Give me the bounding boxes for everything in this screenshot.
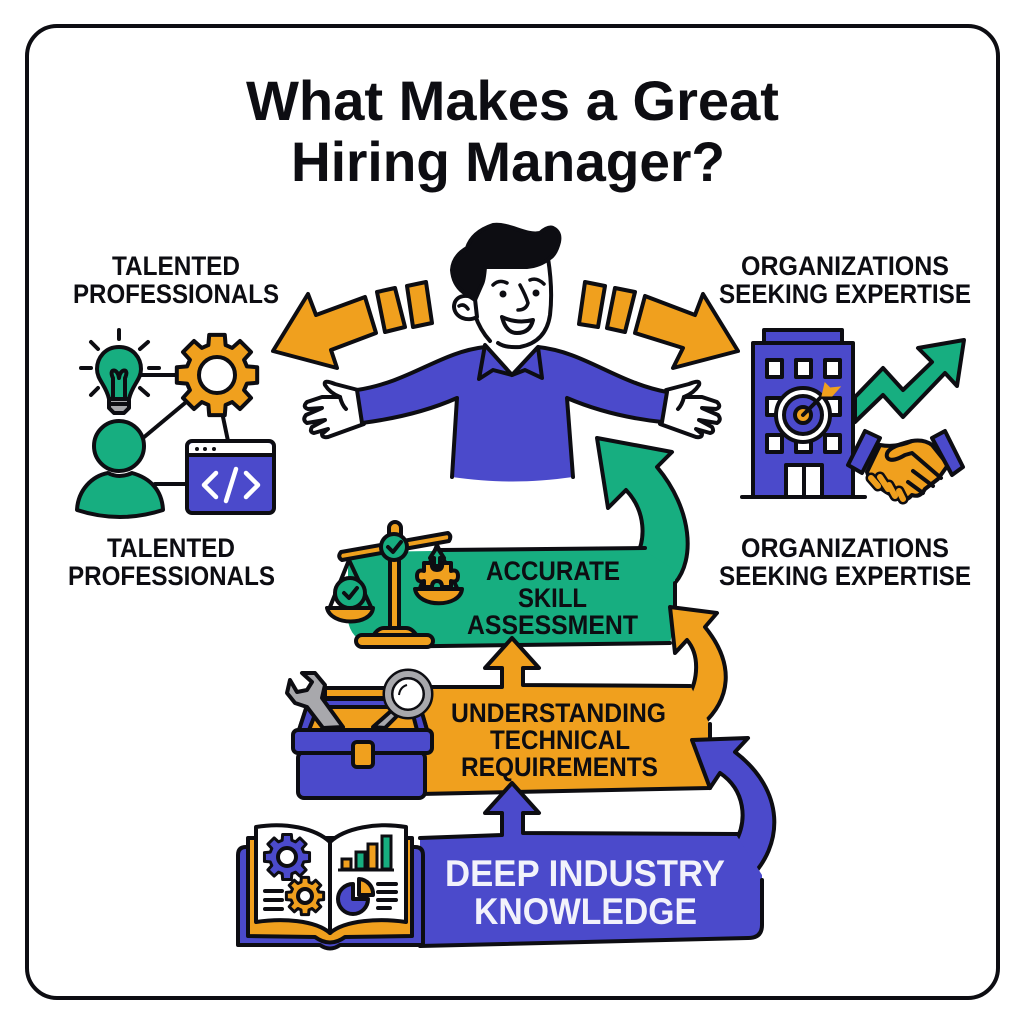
bar chart in book bbox=[338, 836, 394, 870]
icon: green growth arrow bbox=[855, 340, 964, 422]
icon: open book bbox=[238, 825, 423, 948]
icon: handshake bbox=[848, 431, 963, 500]
text: SKILL bbox=[518, 583, 587, 613]
lines right bbox=[378, 884, 396, 908]
icon: person bbox=[77, 421, 163, 517]
left hand bbox=[304, 382, 364, 437]
arrow: orange curved to accurate skill assessment bbox=[670, 607, 726, 725]
title: What Makes a Great bbox=[246, 69, 779, 132]
label: talented professionals bottom: PROFESSIONALS bbox=[68, 561, 275, 591]
text: KNOWLEDGE bbox=[474, 891, 697, 932]
sweater outline bbox=[357, 347, 667, 477]
band: understanding technical requirements bbox=[420, 638, 710, 794]
label: talented professionals top: TALENTED bbox=[112, 251, 240, 281]
smile bbox=[502, 317, 533, 333]
label: organizations seeking expertise bottom: SEEKING EXPERTISE bbox=[719, 561, 971, 591]
text: ASSESSMENT bbox=[467, 610, 638, 640]
icon: office building bbox=[742, 330, 865, 497]
band: deep industry knowledge bbox=[420, 783, 762, 946]
text: ACCURATE bbox=[486, 556, 620, 586]
text bbox=[467, 556, 638, 640]
band: accurate skill assessment bbox=[348, 548, 675, 647]
right hand bbox=[660, 382, 720, 437]
wrench bbox=[287, 673, 343, 728]
icon: orange gear bbox=[177, 335, 257, 415]
windows bbox=[767, 360, 840, 452]
collar bbox=[479, 345, 542, 379]
icon: talented professionals network bbox=[77, 330, 274, 517]
lines left bbox=[265, 891, 282, 909]
label: organizations seeking expertise top: SEEKING EXPERTISE bbox=[719, 279, 971, 309]
label: organizations seeking expertise bottom: ORGANIZATIONS bbox=[741, 533, 949, 563]
left pan bbox=[327, 560, 373, 622]
text: REQUIREMENTS bbox=[461, 752, 658, 782]
text bbox=[451, 698, 666, 782]
text: DEEP INDUSTRY bbox=[445, 853, 725, 894]
gears in book bbox=[264, 834, 324, 915]
illustration: hiring manager figure bbox=[304, 225, 720, 482]
label: organizations seeking expertise top: ORGANIZATIONS bbox=[741, 251, 949, 281]
facial features bbox=[459, 279, 544, 310]
lid and body bbox=[298, 752, 425, 798]
arrow: blue curved to understanding technical requirements bbox=[692, 738, 774, 880]
title: Hiring Manager? bbox=[291, 130, 725, 193]
label: organizations seeking expertise bottom bbox=[719, 533, 971, 591]
icon: lightbulb bbox=[81, 330, 159, 413]
sweater bbox=[357, 347, 667, 482]
text: UNDERSTANDING bbox=[451, 698, 666, 728]
label: talented professionals bottom: TALENTED bbox=[107, 533, 235, 563]
ear bbox=[454, 296, 477, 319]
handle bbox=[325, 688, 393, 698]
arrow: left orange bbox=[273, 282, 432, 368]
label: organizations seeking expertise top bbox=[719, 251, 971, 309]
right pan with puzzle bbox=[415, 545, 462, 603]
label: talented professionals bottom bbox=[68, 533, 275, 591]
icon: code window bbox=[187, 441, 274, 513]
magnifier bbox=[373, 674, 428, 728]
door bbox=[786, 465, 822, 497]
arrow: right orange bbox=[579, 282, 738, 368]
title bbox=[246, 69, 779, 193]
eyes bbox=[500, 290, 540, 298]
hair bbox=[452, 225, 559, 300]
face outline bbox=[475, 258, 551, 347]
icon: balance scale bbox=[327, 522, 462, 647]
text: TECHNICAL bbox=[490, 725, 630, 755]
arrow: green curved to figure bbox=[597, 438, 688, 583]
icon: toolbox with wrench and magnifier bbox=[287, 673, 432, 798]
face and neck bbox=[475, 255, 552, 375]
label: talented professionals top: PROFESSIONALS bbox=[73, 279, 279, 309]
pie chart in book bbox=[338, 879, 373, 914]
label: talented professionals top bbox=[73, 251, 279, 309]
target bbox=[776, 383, 840, 442]
text bbox=[445, 853, 725, 932]
connecting lines bbox=[140, 375, 228, 484]
